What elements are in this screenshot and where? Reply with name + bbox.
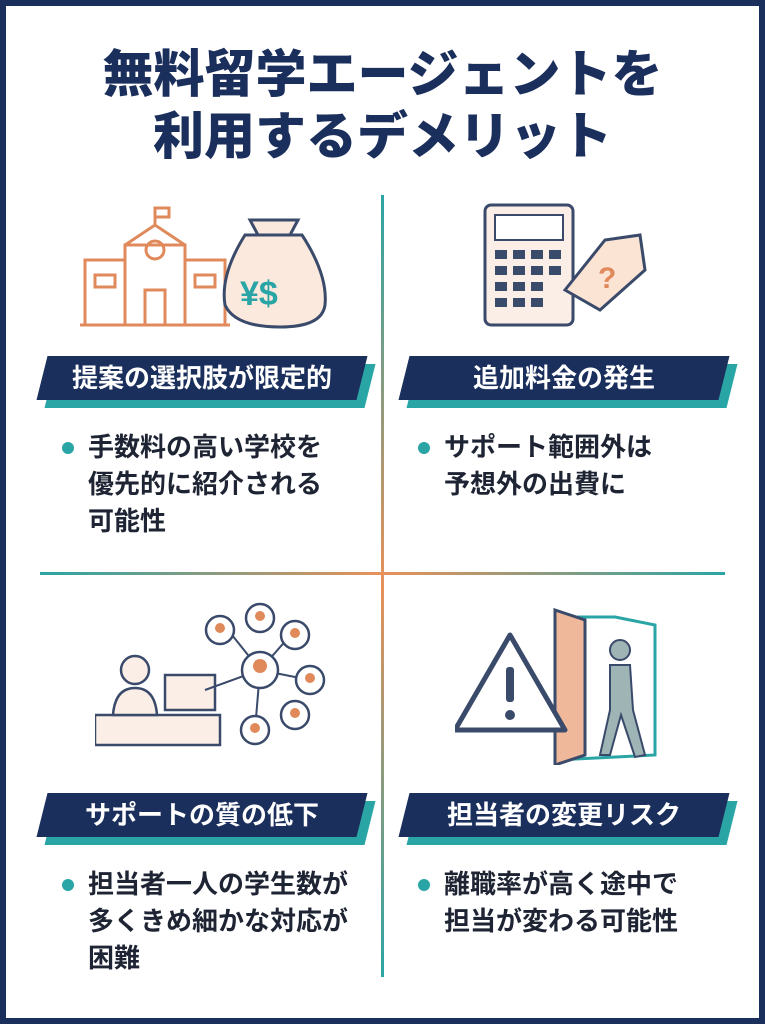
bullet: panel 2: 予想外の出費に [444,469,626,499]
bullet: panel 3: 多くきめ細かな対応が [88,906,348,936]
banner: サポートの質の低下: サポートの質の低下 [85,800,319,830]
icon: calculator and price tag: ? [598,262,616,295]
banner: サポートの質の低下 [36,793,376,845]
title [102,46,662,165]
banner: 追加料金の発生: 追加料金の発生 [473,363,655,393]
banner: 追加料金の発生 [398,356,738,408]
bullet: panel 4: 担当が変わる可能性 [444,906,678,936]
bullet: panel 2 [418,429,652,503]
icon: calculator and price tag [484,204,647,326]
bullet: panel 3: 担当者一人の学生数が [88,869,348,899]
icon: school and money bag [80,206,327,328]
banner: 提案の選択肢が限定的 [36,356,376,408]
bullet: panel 1 [62,429,322,540]
banner: 担当者の変更リスク: 担当者の変更リスク [447,800,681,830]
banner: 提案の選択肢が限定的: 提案の選択肢が限定的 [72,363,332,393]
bullet: panel 1: 手数料の高い学校を [88,432,322,462]
icon: warning and exit door [455,608,656,765]
banner: 担当者の変更リスク [398,793,738,845]
bullet: panel 1: 可能性 [88,506,166,536]
bullet: panel 1: 優先的に紹介される [88,469,322,499]
bullet: panel 4: 離職率が高く途中で [444,869,678,899]
icon: desk worker network [95,602,326,746]
bullet: panel 2: サポート範囲外は [444,432,652,462]
title: 利用するデメリット [153,108,612,165]
title: 無料留学エージェントを [102,46,662,103]
bullet: panel 3 [62,866,348,977]
icon: school and money bag: ¥$ [240,275,278,313]
bullet: panel 4 [418,866,678,940]
bullet: panel 3: 困難 [88,943,140,973]
